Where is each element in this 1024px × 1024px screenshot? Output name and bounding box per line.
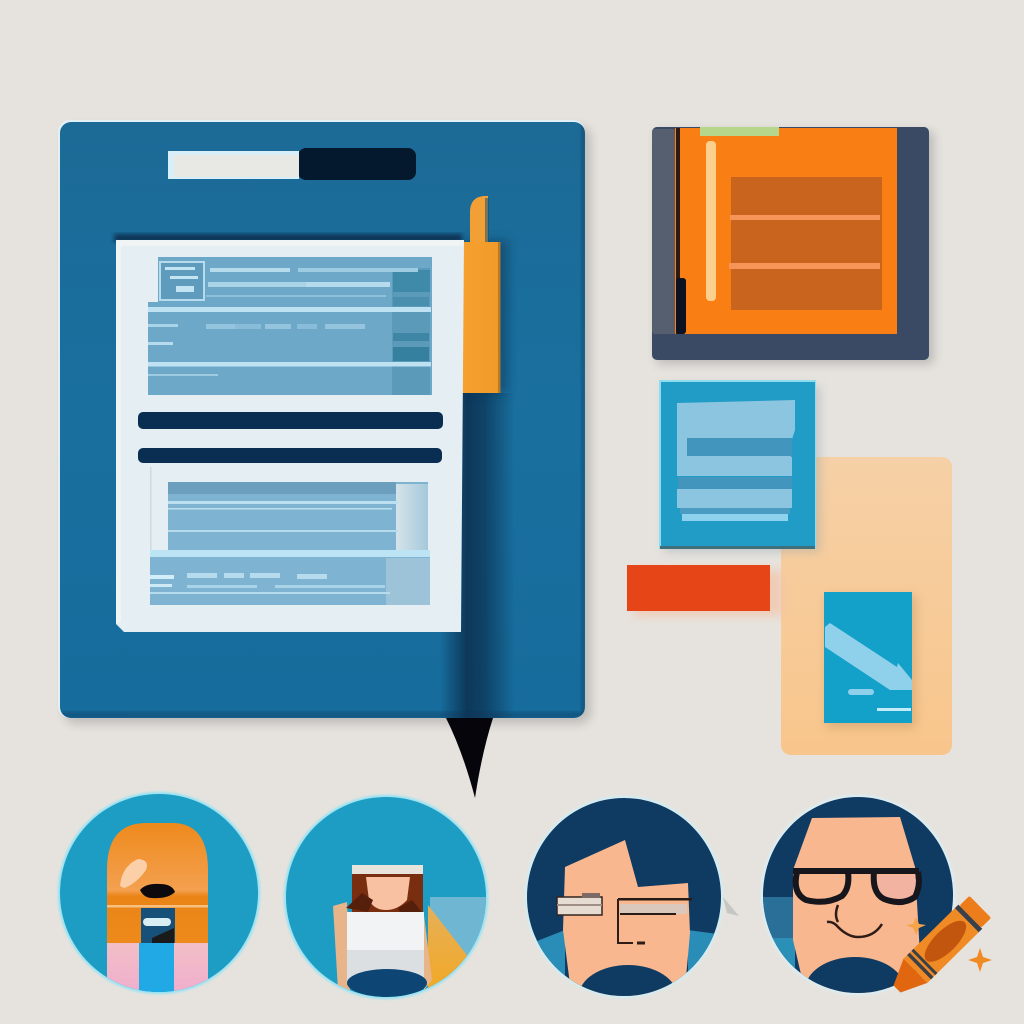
faint sketch mark <box>723 897 739 916</box>
flat glasses <box>557 893 692 943</box>
avatar: orange-haired person <box>58 792 260 994</box>
inner lined block <box>729 177 882 310</box>
panel: blue note card <box>659 380 820 552</box>
paper document sheet <box>116 240 464 632</box>
green label strip <box>700 127 779 136</box>
panel: small blue card with arrow <box>824 592 916 728</box>
logo: orange crayon with sparkles <box>885 895 992 1001</box>
panel: peach backing card <box>781 457 952 755</box>
avatar: man with black glasses <box>760 794 956 996</box>
upper data table <box>148 257 432 395</box>
nose and smile <box>827 905 882 937</box>
navy divider bars <box>138 412 443 463</box>
avatar: woman in white top <box>284 795 490 1000</box>
speech pointer <box>446 718 493 798</box>
avatar: man with dark hair and flat glasses <box>524 796 724 998</box>
orange bookmark tab <box>462 196 500 393</box>
panel: main blue document board <box>58 120 591 724</box>
panel: orange folder card <box>652 127 934 364</box>
red label bar <box>627 565 784 616</box>
illustration canvas <box>56 120 992 1000</box>
title bar <box>168 148 416 180</box>
lower data table <box>150 467 430 605</box>
thick glasses <box>793 871 919 902</box>
highlight stripe <box>706 141 716 301</box>
